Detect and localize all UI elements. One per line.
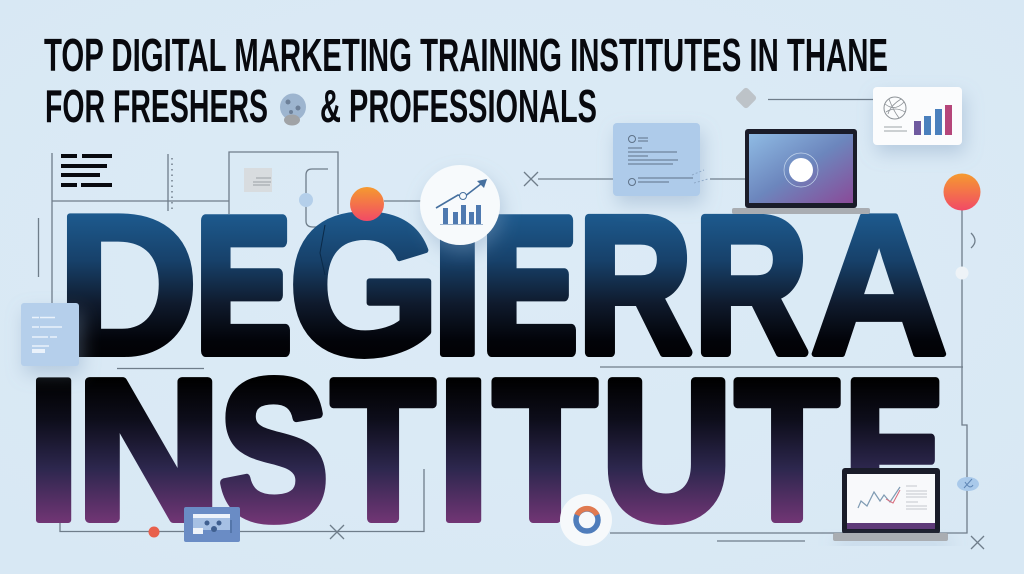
icon: red dot — [148, 526, 160, 538]
big heading: DEGIERRA: R — [694, 176, 808, 394]
title — [44, 29, 888, 132]
big heading: INSTITUTE — [36, 375, 940, 525]
crack line on G — [320, 225, 325, 275]
big heading: INSTITUTE: S — [219, 338, 328, 561]
laptop: top — [732, 129, 870, 214]
big heading: DEGIERRA: E — [482, 179, 577, 392]
icon: arc — [971, 233, 975, 248]
icon: orange circle right — [944, 174, 980, 210]
laptop: bottom — [833, 468, 948, 541]
icon: growth chart circle — [420, 165, 500, 245]
icon: X mark corner — [971, 536, 984, 549]
big heading: INSTITUTE: E — [844, 339, 945, 561]
icon: donut circle — [560, 494, 612, 546]
icon: text lines — [61, 154, 112, 187]
big heading: INSTITUTE: I — [435, 337, 492, 564]
icon: orange circle on G — [350, 187, 384, 221]
big heading: INSTITUTE: T — [493, 340, 597, 562]
big heading: INSTITUTE: U — [601, 339, 732, 561]
icon: globe head — [280, 94, 306, 126]
big heading: DEGIERRA — [57, 173, 948, 397]
big heading: DEGIERRA: I — [430, 174, 485, 397]
big heading: INSTITUTE: T — [735, 340, 839, 562]
panel: notes card — [613, 123, 708, 196]
big heading: DEGIERRA: D — [57, 173, 198, 396]
panel: bottom blue card — [184, 507, 240, 542]
icon: white dot — [956, 266, 968, 280]
big heading: DEGIERRA: A — [810, 173, 948, 397]
icon: blue dot — [299, 193, 313, 207]
small grey card — [244, 168, 272, 192]
icon: X mark top — [524, 172, 538, 186]
big heading: INSTITUTE: I — [25, 337, 82, 564]
big heading: DEGIERRA: R — [578, 176, 692, 394]
circuit lines — [38, 100, 967, 541]
icon: blue ellipse — [957, 477, 979, 491]
title line 2 right: & PROFESSIONALS — [320, 80, 597, 132]
big heading: DEGIERRA: G — [288, 173, 440, 396]
panel: left note card — [21, 303, 79, 366]
icon: diamond — [735, 87, 757, 109]
big heading: DEGIERRA: E — [196, 179, 291, 392]
panel: top right chart card — [873, 87, 962, 145]
big heading: INSTITUTE: N — [76, 339, 221, 561]
big heading: INSTITUTE: T — [331, 340, 435, 562]
title line 2 left: FOR FRESHERS — [45, 80, 268, 132]
icon: X mark bottom — [330, 525, 344, 539]
